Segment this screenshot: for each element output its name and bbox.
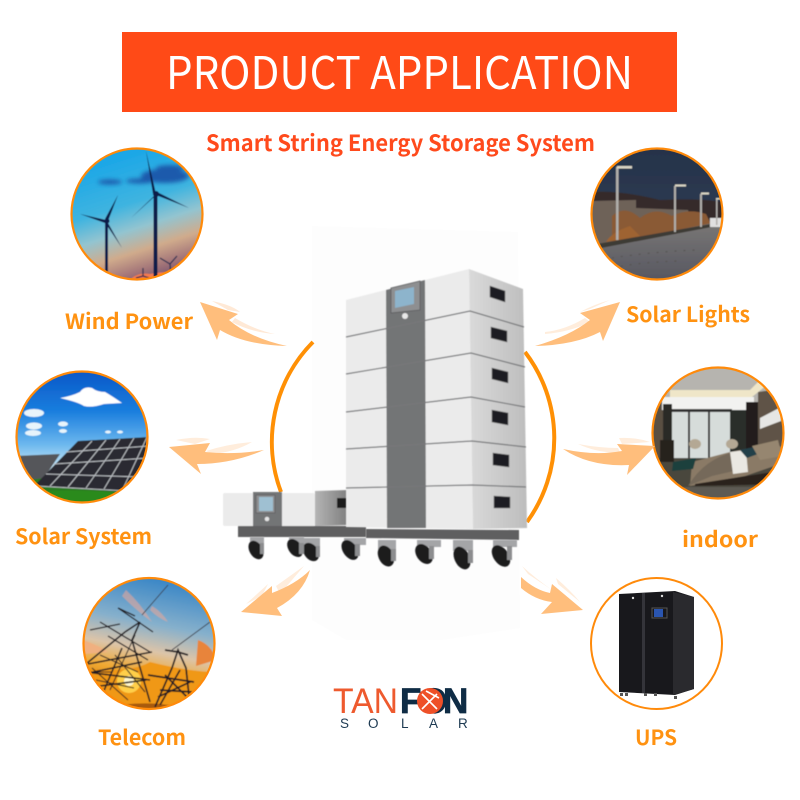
arrow: to wind power bbox=[200, 301, 287, 346]
subtitle: Smart String Energy Storage System bbox=[206, 126, 595, 158]
logo: Tanfon Solar: TAN bbox=[333, 682, 398, 721]
label: wind power: Wind Power bbox=[65, 306, 194, 336]
stack display bbox=[391, 281, 420, 319]
arrow: to UPS bbox=[521, 566, 583, 614]
logo: Tanfon Solar: N bbox=[443, 682, 468, 721]
photo circle: solar system bbox=[15, 371, 149, 510]
orange ring behind product bbox=[272, 342, 554, 522]
icon: UPS cabinet bbox=[619, 591, 694, 699]
arrow: to solar lights bbox=[535, 300, 620, 346]
logo: Tanfon Solar: L bbox=[401, 716, 409, 731]
label: indoor: indoor bbox=[682, 524, 759, 554]
arrow: to telecom bbox=[241, 566, 310, 616]
photo circle: UPS bbox=[591, 578, 722, 709]
label: solar system: Solar System bbox=[15, 521, 152, 551]
photo circle: telecom bbox=[83, 577, 217, 712]
photo circle: solar lights bbox=[591, 148, 723, 282]
photo circle: indoor bbox=[652, 367, 786, 504]
logo: Tanfon Solar: R bbox=[458, 716, 468, 731]
label: solar lights: Solar Lights bbox=[626, 299, 750, 329]
faint photo background bbox=[312, 226, 520, 640]
product: tall battery stack bbox=[346, 269, 527, 540]
stack handles bbox=[490, 286, 510, 508]
arrow: to indoor bbox=[563, 438, 655, 475]
logo: Tanfon Solar: S bbox=[340, 716, 349, 731]
logo: Tanfon Solar: O bbox=[368, 716, 379, 731]
arrow: to solar system bbox=[169, 438, 264, 474]
logo: Tanfon Solar: A bbox=[429, 716, 438, 731]
photo circle: wind power bbox=[70, 148, 204, 284]
logo: Tanfon Solar: O bbox=[420, 682, 447, 721]
product: small battery unit bbox=[223, 490, 366, 537]
label: UPS: UPS bbox=[635, 722, 677, 752]
product casters bbox=[245, 536, 517, 572]
logo: Tanfon Solar bbox=[333, 682, 468, 731]
logo: Tanfon Solar: F bbox=[400, 682, 421, 721]
label: telecom: Telecom bbox=[98, 722, 186, 752]
title banner: PRODUCT APPLICATION bbox=[166, 37, 633, 102]
